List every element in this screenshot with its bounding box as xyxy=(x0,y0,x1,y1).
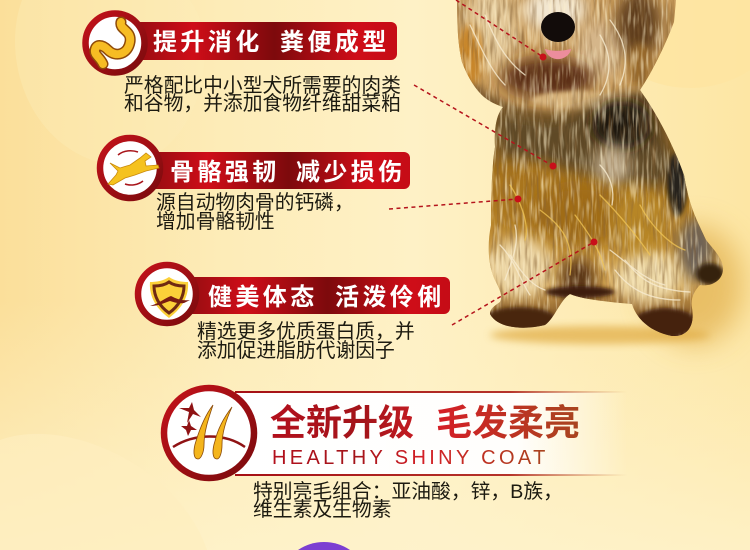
description 2: 增加骨骼韧性 xyxy=(156,211,275,233)
nose xyxy=(541,12,575,42)
callout dots xyxy=(514,54,598,246)
description 1: 严格配比中小型犬所需要的肉类 xyxy=(124,75,401,97)
callout dashed lines xyxy=(389,0,594,325)
title text 1: 粪便成型 xyxy=(280,29,390,56)
description 3: 精选更多优质蛋白质，并 xyxy=(197,321,415,343)
title text 2: 减少损伤 xyxy=(296,159,406,186)
main heading: 全新升级 xyxy=(270,402,414,443)
title text 1: 提升消化 xyxy=(153,29,263,56)
main heading: 毛发柔亮 xyxy=(436,402,580,443)
title bar 2 xyxy=(140,152,410,189)
paws xyxy=(484,307,556,331)
feature 1: digestion xyxy=(86,14,401,115)
description 4: 特别亮毛组合：亚油酸，锌，B族， xyxy=(253,481,563,503)
english subtitle: HEALTHY SHINY COAT xyxy=(272,447,549,469)
icon: hair follicles xyxy=(164,388,254,478)
head fur xyxy=(457,0,673,113)
title text 3: 活泼伶俐 xyxy=(335,284,445,311)
description 1: 和谷物，并添加食物纤维甜菜粕 xyxy=(124,93,401,115)
title bar 1 xyxy=(125,22,397,60)
title text 3: 健美体态 xyxy=(208,284,318,311)
feature 4: shiny coat xyxy=(164,388,627,521)
fur strands xyxy=(470,15,690,300)
white banner xyxy=(235,391,627,476)
fur texture layers xyxy=(457,0,723,336)
title text 2: 骨骼强韧 xyxy=(170,159,280,186)
neck and chest xyxy=(497,92,682,190)
purple circle xyxy=(298,542,350,550)
dog photo xyxy=(440,0,743,345)
lower fur xyxy=(488,238,552,298)
icon: stomach xyxy=(86,14,144,72)
description 4: 维生素及生物素 xyxy=(253,499,391,521)
tongue xyxy=(545,49,571,59)
feature 2: bones xyxy=(100,138,410,233)
description 2: 源自动物肉骨的钙磷， xyxy=(156,192,354,214)
description 3: 添加促进脂肪代谢因子 xyxy=(197,340,395,362)
feature 3: body xyxy=(138,265,450,362)
icon: running dog xyxy=(100,138,160,198)
title bar 3 xyxy=(178,277,450,314)
icon: shield xyxy=(138,265,196,323)
